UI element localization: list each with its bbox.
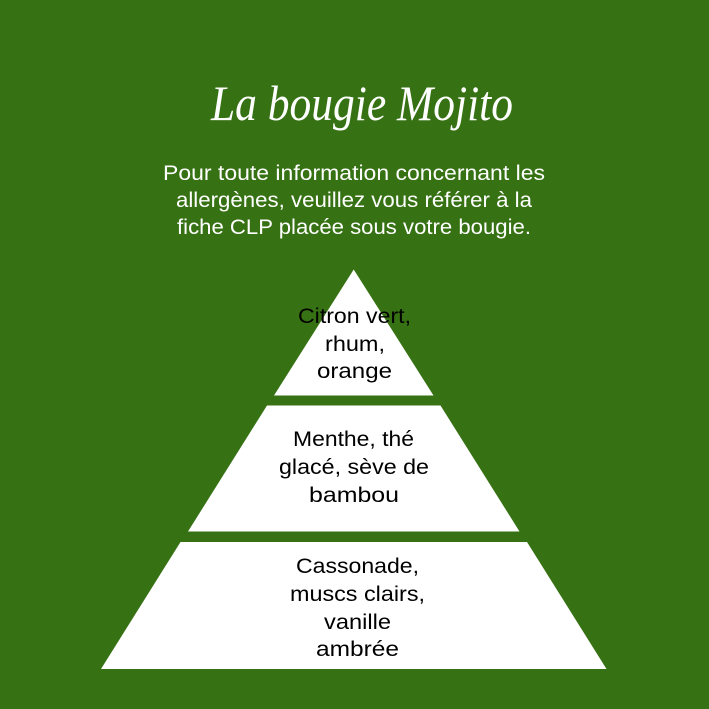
pyramid bottom tier: base notes: vanille xyxy=(324,611,391,634)
pyramid top tier: top notes xyxy=(274,270,434,396)
intro text block: allergènes, veuillez vous référer à la xyxy=(176,189,532,212)
pyramid middle tier: heart notes: glacé, sève de xyxy=(279,456,429,479)
pyramid top tier: top notes: orange xyxy=(317,360,392,383)
pyramid middle tier: heart notes: Menthe, thé xyxy=(293,428,414,451)
pyramid top tier: top notes: rhum, xyxy=(325,333,385,356)
title: La bougie Mojito xyxy=(210,75,513,131)
pyramid chart xyxy=(101,270,606,669)
intro text block: fiche CLP placée sous votre bougie. xyxy=(177,216,531,239)
pyramid middle tier: heart notes xyxy=(188,406,520,532)
pyramid bottom tier: base notes: ambrée xyxy=(316,638,399,661)
pyramid middle tier: heart notes: bambou xyxy=(309,484,399,507)
intro text block: Pour toute information concernant les xyxy=(163,162,545,185)
pyramid bottom tier: base notes: Cassonade, xyxy=(296,555,419,578)
pyramid bottom tier: base notes xyxy=(101,542,606,669)
intro text block xyxy=(163,162,545,239)
pyramid top tier: top notes: Citron vert, xyxy=(298,305,411,328)
pyramid bottom tier: base notes: muscs clairs, xyxy=(290,583,425,606)
